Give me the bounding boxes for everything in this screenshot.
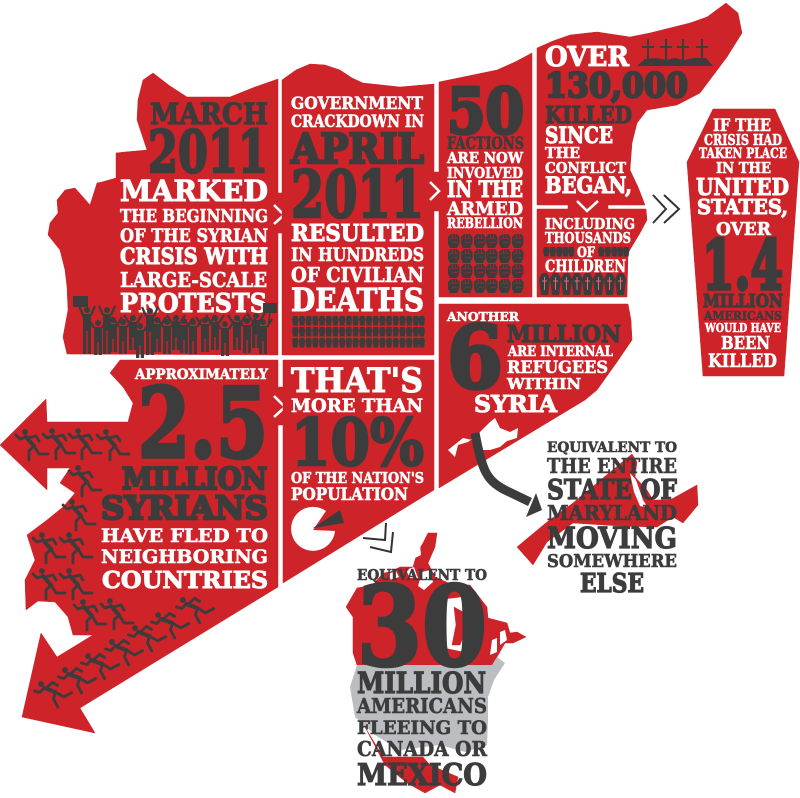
text: March 2011 marked the beginning: LARGE-SCALE (120, 268, 267, 292)
text: March 2011 marked the beginning: PROTESTS (120, 289, 267, 319)
text: if the crisis had taken place in the United States: KILLED (708, 350, 777, 372)
arrow: double down chevron to Canada (363, 523, 393, 552)
text: approximately 2.5 million Syrians: COUNTRIES (102, 567, 268, 594)
text: another 6 million: REFUGEES (507, 358, 608, 377)
text: 50 factions in the armed rebellion (446, 74, 524, 232)
text: another 6 million: 6 (447, 308, 503, 409)
icon: four crosses on a burial mound (637, 39, 713, 66)
text: government crackdown: GOVERNMENT (291, 94, 424, 113)
text: if the crisis had taken place in the United States: OVER (716, 219, 772, 240)
text: that's more than 10% of the nation's population (291, 361, 424, 504)
text: equivalent to the entire state of Maryland: EQUIVALENT TO (547, 440, 677, 456)
map: Canada in red (346, 533, 526, 665)
text: equivalent to the entire state of Maryland: MOVING (547, 521, 677, 555)
map: United States in grey (350, 657, 505, 752)
text: March 2011 marked the beginning (120, 97, 268, 319)
text: if the crisis had taken place in the United States: IN THE (716, 159, 771, 177)
text: 50 factions in the armed rebellion: ARMED (446, 198, 523, 220)
text: approximately 2.5 million Syrians: APPROXIMATELY (134, 367, 268, 383)
panel: April 2011 crackdown (282, 64, 434, 355)
icon: small coffins (543, 247, 629, 256)
text: another 6 million: SYRIA (474, 391, 558, 418)
arrow: to April panel (274, 205, 284, 224)
text: another 6 million: MILLION (507, 321, 621, 348)
text: government crackdown (290, 94, 424, 319)
text: including thousands of children (545, 215, 635, 276)
map: Chesapeake Bay in white (630, 473, 648, 508)
text: over 130,000 killed since the conflict began: SINCE (545, 123, 613, 149)
text: government crackdown: RESULTED (291, 220, 424, 247)
arrow: down chevron to children (577, 201, 598, 211)
text: March 2011 marked the beginning: MARKED (120, 174, 268, 208)
text: equivalent to 30 million Americans: MILLION (357, 666, 486, 700)
panel: Maryland equivalent (475, 433, 698, 599)
text: including thousands of children: OF (577, 245, 595, 261)
text: government crackdown: IN HUNDREDS (291, 244, 424, 266)
text: over 130,000 killed since the conflict began (545, 41, 688, 199)
text: government crackdown: 2011 (291, 157, 424, 233)
text: if the crisis had taken place in the United States: BEEN (721, 333, 770, 354)
map region: north-west Syria (48, 73, 282, 355)
map: Maryland in red (517, 454, 698, 565)
text: 50 factions in the armed rebellion: FACTIONS (447, 134, 524, 153)
text: equivalent to 30 million Americans: AMERICANS (356, 694, 487, 718)
text: equivalent to 30 million Americans: MEXICO (357, 758, 487, 793)
text: approximately 2.5 million Syrians: NEIGHBORING (101, 546, 268, 568)
panel: 130,000 killed (537, 3, 742, 297)
text: equivalent to 30 million Americans: 30 (357, 562, 487, 691)
text: that's more than 10% of the nation's population: 10% (291, 405, 424, 481)
panel: March 2011 protests (48, 73, 284, 358)
text: another 6 million: ARE INTERNAL (507, 344, 613, 360)
text: another 6 million (446, 308, 621, 418)
text: including thousands of children: THOUSANDS (545, 229, 631, 247)
arrow: to 10 percent panel (274, 396, 285, 417)
text: equivalent to the entire state of Maryland: SOMEWHERE (547, 551, 677, 572)
text: March 2011 marked the beginning: MARCH (150, 97, 268, 131)
text: 50 factions in the armed rebellion: ARE NOW (446, 149, 524, 167)
text: approximately 2.5 million Syrians: MILLION (122, 462, 267, 497)
text: 50 factions in the armed rebellion: 50 (447, 74, 524, 148)
arrow: to 50 factions panel (430, 182, 439, 200)
text: that's more than 10% of the nation's population: OF THE NATION'S (291, 469, 424, 487)
text: that's more than 10% of the nation's population: MORE THAN (291, 395, 423, 417)
panel: coffin with US comparison (687, 109, 799, 376)
icon: row of coffins with crosses (539, 273, 626, 295)
map region: south Syria (283, 360, 434, 583)
text: if the crisis had taken place in the United States: IF THE (713, 116, 771, 135)
text: over 130,000 killed since the conflict began: THE (545, 144, 580, 162)
panel: 30 million Americans (346, 533, 526, 793)
text: if the crisis had taken place in the United States (696, 116, 789, 372)
map region: north-central Syria (282, 64, 434, 355)
text: March 2011 marked the beginning: 2011 (148, 118, 268, 186)
icon: grid of raised fists (448, 234, 524, 293)
text: including thousands of children: INCLUDING (545, 215, 635, 233)
text: March 2011 marked the beginning: CRISIS WITH (120, 244, 268, 270)
text: including thousands of children: CHILDREN (545, 257, 626, 276)
text: equivalent to 30 million Americans (356, 562, 488, 793)
text: equivalent to the entire state of Maryland: STATE OF (547, 474, 677, 506)
text: equivalent to the entire state of Maryland: THE ENTIRE (547, 454, 677, 478)
arrow: double chevron to coffin (653, 195, 679, 223)
icon: runners fleeing (16, 428, 216, 713)
text: equivalent to 30 million Americans: EQUIVALENT TO (357, 567, 487, 584)
text: approximately 2.5 million Syrians: SYRIANS (101, 490, 268, 527)
text: approximately 2.5 million Syrians (101, 367, 268, 594)
text: 50 factions in the armed rebellion: REBELLION (447, 216, 523, 232)
text: March 2011 marked the beginning: THE BEGINNING (120, 206, 268, 227)
text: another 6 million: WITHIN (506, 375, 581, 393)
icon: coffin shape (687, 109, 799, 376)
text: approximately 2.5 million Syrians: 2.5 (138, 367, 268, 480)
text: 50 factions in the armed rebellion: IN THE (447, 177, 523, 203)
panel: 6 million internal refugees (439, 304, 632, 488)
text: over 130,000 killed since the conflict began: CONFLICT (545, 159, 627, 177)
panel: 2.5 million refugees (0, 360, 285, 733)
map region: south-east Syria (439, 304, 632, 488)
map: Hudson Bay (437, 597, 469, 652)
icon: pie chart with slice removed (291, 507, 344, 551)
map: bits of land inside Hudson Bay (452, 607, 466, 645)
text: government crackdown: DEATHS (291, 282, 424, 319)
text: government crackdown: APRIL (290, 125, 424, 173)
text: equivalent to the entire state of Maryland (547, 440, 677, 599)
map: Maryland in white (448, 418, 518, 457)
text: equivalent to the entire state of Maryland: ELSE (580, 569, 644, 599)
text: if the crisis had taken place in the United States: AMERICANS (703, 308, 782, 323)
map region: western Syria with arrows (0, 360, 283, 733)
text: government crackdown: OF CIVILIAN (291, 263, 424, 287)
text: over 130,000 killed since the conflict began: 130,000 (545, 66, 688, 106)
icon: rows of coffins (292, 316, 425, 348)
text: equivalent to the entire state of Maryland: MARYLAND (547, 501, 677, 525)
text: March 2011 marked the beginning: OF THE SYRIAN (120, 225, 268, 247)
text: over 130,000 killed since the conflict began: BEGAN, (545, 173, 632, 199)
map: Arctic islands gaps (388, 545, 507, 655)
text: 50 factions in the armed rebellion: INVOLVED (447, 164, 523, 182)
text: that's more than 10% of the nation's population: POPULATION (291, 485, 408, 504)
map region: northern Syria (434, 53, 532, 297)
text: that's more than 10% of the nation's population: THAT'S (291, 361, 423, 401)
text: over 130,000 killed since the conflict began: KILLED (545, 102, 632, 129)
text: over 130,000 killed since the conflict began: OVER (545, 41, 629, 73)
icon: protest crowd with placards (73, 296, 277, 358)
text: another 6 million: ANOTHER (446, 309, 520, 324)
map: Mexico in red (365, 727, 458, 793)
text: approximately 2.5 million Syrians: HAVE FLED TO (101, 525, 268, 547)
arrow: curved arrow to Maryland (475, 433, 542, 517)
panel: 50 factions (430, 53, 532, 297)
text: if the crisis had taken place in the United States: STATES, (697, 195, 788, 219)
map region: north-east Syria (537, 3, 742, 297)
text: government crackdown: CRACKDOWN IN (291, 112, 424, 131)
text: if the crisis had taken place in the United States: MILLION (703, 291, 783, 312)
text: equivalent to 30 million Americans: CANADA OR (357, 737, 488, 761)
panel: more than 10 percent (283, 360, 434, 583)
text: equivalent to 30 million Americans: FLEEING TO (357, 717, 487, 739)
